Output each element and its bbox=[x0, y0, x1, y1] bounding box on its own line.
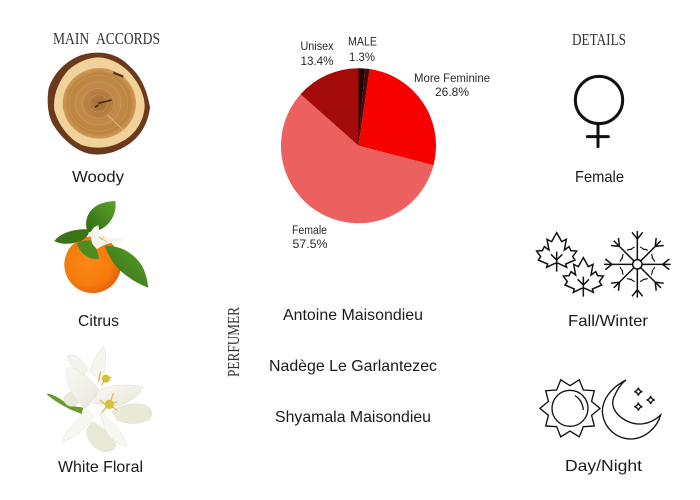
icon: female symbol bbox=[575, 76, 623, 147]
perfumer name: antoine: Antoine Maisondieu bbox=[283, 307, 423, 324]
slice: other dark bbox=[358, 68, 370, 146]
icon: white flower bbox=[47, 346, 152, 452]
slice: female bbox=[281, 94, 434, 223]
icon: sun and moon bbox=[540, 380, 661, 439]
icon: wood slice bbox=[48, 53, 150, 154]
pie label: more feminine bbox=[414, 73, 490, 99]
pie label: more feminine: 26.8% bbox=[435, 87, 469, 99]
slice: more feminine bbox=[358, 69, 436, 165]
pie label: female: Female bbox=[292, 225, 327, 237]
pie label: male: MALE bbox=[348, 36, 377, 48]
pie label: female: 57.5% bbox=[292, 239, 328, 251]
pie label: unisex bbox=[300, 41, 334, 68]
label: white floral: White Floral bbox=[58, 459, 143, 476]
pie label: female bbox=[292, 225, 328, 251]
heading: perfumer: PERFUMER bbox=[224, 307, 243, 377]
icon: snowflake bbox=[604, 231, 671, 298]
label: citrus: Citrus bbox=[78, 313, 119, 330]
icon: maple leaf one bbox=[537, 233, 577, 272]
pie label: male bbox=[348, 36, 377, 64]
label: day night: Day/Night bbox=[565, 458, 643, 475]
slice: male bbox=[358, 68, 365, 146]
perfumer name: shyamala: Shyamala Maisondieu bbox=[275, 409, 431, 426]
label: female: Female bbox=[575, 169, 624, 186]
icon: orange with leaves bbox=[54, 201, 148, 293]
pie label: male: 1.3% bbox=[349, 52, 375, 64]
slice: unisex bbox=[301, 68, 358, 146]
perfumer name: nadege: Nadège Le Garlantezec bbox=[269, 358, 437, 375]
heading: main accords: MAIN ACCORDS bbox=[53, 29, 160, 48]
icon: crescent moon bbox=[602, 380, 661, 439]
pie label: unisex: Unisex bbox=[300, 41, 334, 53]
pie label: more feminine: More Feminine bbox=[414, 73, 490, 85]
icon: leaves and snowflake bbox=[537, 231, 671, 298]
pie label: unisex: 13.4% bbox=[300, 56, 334, 68]
label: woody: Woody bbox=[72, 169, 124, 186]
icon: sun bbox=[540, 380, 600, 437]
icon: maple leaf two bbox=[563, 258, 603, 297]
pie chart bbox=[281, 68, 436, 223]
heading: details: DETAILS bbox=[572, 30, 626, 49]
label: fall winter: Fall/Winter bbox=[568, 313, 649, 330]
